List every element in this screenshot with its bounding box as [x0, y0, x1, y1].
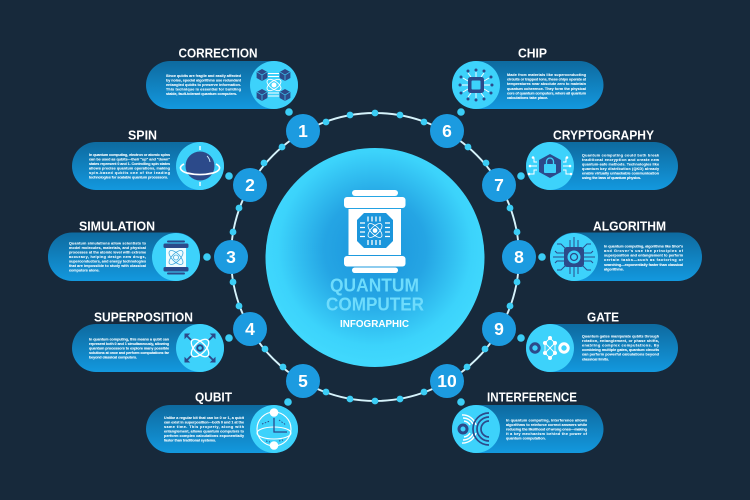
panel: chip: [452, 47, 604, 109]
panel: cryptography: quantum key distribution (QKD) already: [582, 167, 660, 171]
panel: qubit: Unlike a regular bit that can be 0 or 1, a qubit: [164, 416, 245, 420]
panel: algorithm: In quantum computing, algorithms like Shor's: [604, 244, 683, 248]
panel: correction: This technique is essential for building: [166, 87, 241, 91]
panel: interference: [452, 391, 604, 453]
node 10: 10: [437, 371, 457, 391]
center title: QUANTUM: [330, 276, 419, 296]
panel: interference: reducing the likelihood of wrong ones—making: [506, 427, 587, 431]
panel: cryptography: using the laws of quantum physics.: [582, 176, 641, 180]
panel: spin: spin-based qubits one of the leading: [89, 171, 170, 175]
panel: algorithm: and Grover's use the principles of: [604, 249, 684, 253]
panel: interference: In quantum computing, interference allows: [506, 418, 587, 422]
panel: cryptography: enable virtually unhackable communication: [582, 172, 660, 176]
panel: simulation: processes at the atomic level with extreme: [69, 251, 146, 255]
panel: simulation: superconductors, and energy technologies: [69, 260, 146, 264]
panel: cryptography: quantum-safe methods. Technologies like: [582, 162, 659, 166]
ring connecting the numbered nodes: [203, 108, 546, 406]
panel: chip: core of quantum computers, where all quantum: [507, 91, 587, 95]
node 1: [286, 114, 320, 148]
panel: superposition: SUPERPOSITION: [94, 311, 193, 325]
panel: chip: CHIP: [518, 47, 548, 61]
panel: interference: quantum computation.: [506, 436, 546, 440]
panel: correction: stable, fault-tolerant quantum computers.: [166, 92, 237, 96]
panel: interference: algorithms to reinforce correct answers while: [506, 423, 587, 427]
panel: correction: entangled qubits to preserve information.: [166, 83, 241, 87]
panel: chip: temperatures near absolute zero to maintain: [507, 82, 587, 86]
node 3: 3: [226, 247, 236, 267]
panel: gate: rotation, entanglement, or phase shifts,: [582, 339, 659, 343]
panel: spin: In quantum computing, electron or atomic spins: [89, 153, 170, 157]
node 2: 2: [245, 175, 255, 195]
panel: gate: classical limits.: [582, 357, 609, 361]
panel: spin: can be used as qubits—their "up" and "down": [89, 158, 170, 162]
panel: spin: SPIN: [128, 129, 157, 143]
panel: spin: states represent 0 and 1. Controlling spin states: [89, 162, 170, 166]
panel: spin: technologies for scalable quantum processors.: [89, 175, 168, 179]
panel: algorithm: superposition and entanglement to perform: [604, 254, 684, 258]
panel: correction: Since qubits are fragile and easily affected: [166, 74, 242, 78]
panel: qubit: same time. This property, along with: [164, 425, 245, 429]
node 5: 5: [298, 371, 308, 391]
panel: qubit: [146, 391, 298, 453]
panel: correction: by noise, special algorithms use redundant: [166, 78, 242, 82]
panel: spin: [72, 129, 224, 190]
panel: simulation: that are impossible to study with classical: [69, 264, 146, 268]
node 10: [430, 364, 464, 398]
central circle: quantum computer: [266, 148, 484, 367]
panel: gate: combining multiple gates, quantum circuits: [582, 348, 659, 352]
node 7: [482, 168, 516, 202]
panel: simulation: Quantum simulations allow scientists to: [69, 242, 147, 246]
center title: INFOGRAPHIC: [340, 318, 409, 330]
node 3: [214, 240, 248, 274]
panel: qubit: can exist in superposition—both 0 and 1 at the: [164, 420, 244, 424]
panel: superposition: beyond classical computers.: [89, 356, 137, 360]
panel: qubit: QUBIT: [195, 391, 232, 405]
panel: gate: enabling complex computations. By: [582, 344, 660, 348]
panel: superposition: represent both 0 and 1 simultaneously, allowing: [89, 342, 169, 346]
panel: algorithm: [550, 220, 702, 281]
panel: cryptography: Quantum computing could both break: [582, 154, 660, 158]
panel: correction: [146, 47, 298, 109]
panel: interference: INTERFERENCE: [487, 391, 577, 405]
panel: simulation: SIMULATION: [79, 220, 155, 234]
panel: algorithm: algorithms.: [604, 267, 624, 271]
panel: chip: calculations take place.: [507, 96, 548, 100]
panel: algorithm: searching—exponentially faster than classical: [604, 263, 683, 267]
node 8: [502, 240, 536, 274]
panel: superposition: solutions at once and perform computations far: [89, 351, 170, 355]
panel: cryptography: traditional encryption and create new: [582, 158, 659, 162]
node 6: 6: [442, 121, 452, 141]
panel: qubit: faster than traditional systems.: [164, 438, 216, 442]
center title: [326, 276, 424, 330]
panel: superposition: quantum processors to explore many possible: [89, 347, 169, 351]
panel: gate: GATE: [587, 311, 619, 325]
panel: simulation: model molecules, materials, and physical: [69, 246, 146, 250]
panel: simulation: computers alone.: [69, 269, 100, 273]
panel: superposition: [72, 311, 224, 372]
panel: spin: allows precise quantum operations, making: [89, 166, 170, 170]
panel: simulation: [48, 220, 200, 281]
panel: qubit: perform complex calculations exponentially: [164, 434, 245, 438]
node 8: 8: [514, 247, 524, 267]
panel: correction: CORRECTION: [178, 47, 258, 61]
panel: chip: Made from materials like superconducting: [507, 73, 586, 77]
panel: algorithm: ALGORITHM: [593, 220, 666, 234]
panel: simulation: accuracy, helping design new drugs,: [69, 255, 146, 259]
icon: quantum capsule: [344, 190, 406, 273]
panel: chip: quantum coherence. They form the physical: [507, 87, 586, 91]
node 9: [482, 312, 516, 346]
panel: cryptography: CRYPTOGRAPHY: [553, 129, 655, 143]
node 1: 1: [298, 121, 308, 141]
panel: algorithm: certain tasks—such as factoring or: [604, 258, 684, 262]
node 6: [430, 114, 464, 148]
panel: cryptography: [526, 129, 678, 190]
node 4: 4: [245, 319, 255, 339]
panel: gate: [526, 311, 678, 372]
node 5: [286, 364, 320, 398]
node 9: 9: [494, 319, 504, 339]
node 2: [233, 168, 267, 202]
panel: gate: Quantum gates manipulate qubits through: [582, 335, 660, 339]
panel: gate: can perform powerful calculations beyond: [582, 353, 660, 357]
node 4: [233, 312, 267, 346]
center title: COMPUTER: [326, 294, 424, 314]
panel: interference: it a key mechanism behind the power of: [506, 432, 588, 436]
node 7: 7: [494, 175, 504, 195]
panel: qubit: entanglement, allows quantum computers to: [164, 430, 245, 434]
panel: chip: circuits or trapped ions, these chips operate at: [507, 78, 587, 82]
panel: superposition: In quantum computing, this means a qubit can: [89, 338, 170, 342]
